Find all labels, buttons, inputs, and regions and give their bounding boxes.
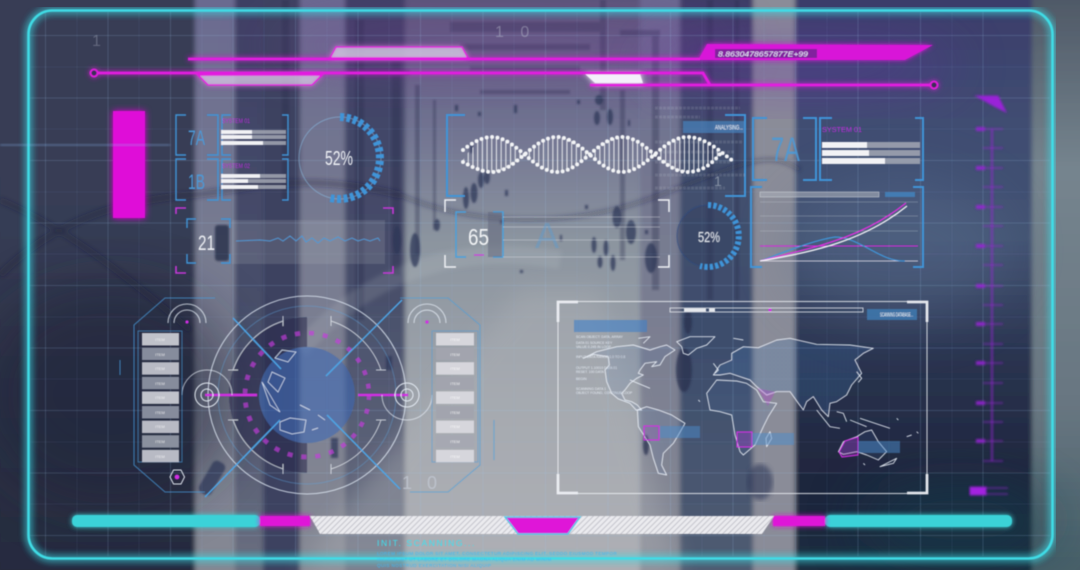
map chips [660, 426, 900, 453]
hex marker [170, 470, 184, 484]
bars 1B [221, 174, 286, 189]
label 1B: 1B [188, 171, 205, 194]
code readout: RESET. 100 DATA [576, 370, 605, 374]
outer rings [208, 296, 406, 494]
code text behind [655, 108, 745, 188]
panel: 7A bars right [753, 118, 923, 180]
inner arcs [228, 316, 386, 474]
diagonal blue lines [205, 300, 402, 497]
North America [583, 345, 675, 410]
right node [930, 81, 938, 89]
code readout: SCAN OBJECT: DATA, ARRAY [576, 335, 624, 339]
list rows: ITEM [155, 381, 165, 386]
line two with node [98, 73, 930, 85]
panel: world map [558, 302, 927, 494]
top right magenta banner [698, 44, 933, 60]
globe [229, 317, 355, 473]
magenta map regions [644, 388, 858, 457]
left target [182, 370, 232, 407]
right purple ruler [970, 96, 1008, 495]
list rows: ITEM [155, 395, 165, 400]
panel: 7A and 1B bars left [176, 115, 288, 200]
scanning caption: QUIS NOSTRUD EXERCITATION NISI ALIQUIP [377, 563, 491, 568]
panel: DNA bracket: ANALYSING... [715, 126, 743, 132]
bracket set 1B [176, 159, 288, 200]
line one [188, 58, 700, 60]
bracket set 7A [176, 115, 288, 155]
cyan right segments [825, 515, 1012, 527]
upper translucent tab [330, 47, 468, 58]
gauge 52 percent large [299, 117, 381, 199]
South America [637, 407, 685, 475]
ghost numerals: 1 0 [402, 473, 442, 493]
gauge 52 percent small: 52% [698, 229, 720, 246]
code readout: VALUE 0.245 IN LOOP [576, 345, 612, 349]
magenta right connector [773, 516, 825, 526]
map header [574, 320, 647, 332]
dark silhouettes [197, 95, 692, 497]
lower translucent tab [198, 75, 322, 85]
smoky shading [0, 285, 240, 505]
code readout: OBJECT FOUND, CONTINUE LOOP [576, 391, 633, 395]
panel: 7A bars right: 7A [771, 131, 800, 169]
list rows: ITEM [450, 337, 460, 342]
Africa [707, 380, 777, 455]
hatched band [310, 516, 774, 534]
panel: radar [182, 296, 432, 497]
list rows [142, 333, 179, 462]
scanning chip: SCANNING DATABASE... [880, 312, 913, 318]
list rows: ITEM [450, 366, 460, 371]
panel: readout 65: 65 [468, 224, 489, 250]
code readout: BEGIN [576, 377, 587, 381]
list rows: ITEM [450, 439, 460, 444]
faint dark helix [0, 160, 800, 350]
magenta left connector [260, 516, 310, 526]
centre magenta trapezoid [505, 517, 580, 534]
list rows: ITEM [155, 454, 165, 459]
analysis chip [683, 121, 745, 133]
progress strip [670, 308, 863, 312]
lighter corridor floor [300, 290, 680, 570]
Asia and Europe [713, 338, 873, 417]
panel: right list [400, 298, 494, 492]
bars 7A [221, 130, 286, 145]
Australia [838, 430, 887, 460]
code readout: SCANNING DATA 1 [576, 387, 606, 391]
gauge 52 percent small [677, 205, 739, 267]
panel: DNA bracket: 1 [714, 173, 722, 189]
blue flare [0, 144, 170, 146]
scanning caption: INIT. SCANNING... [377, 538, 476, 548]
panel: DNA bracket [447, 108, 745, 196]
list rows: ITEM [155, 352, 165, 357]
panel: line chart [751, 187, 923, 267]
magenta block [113, 111, 145, 218]
code readout [576, 335, 633, 395]
corridor shelving stripes [282, 0, 739, 320]
panel: 7A bars right: SYSTEM 01 [822, 127, 862, 134]
list rows: ITEM [450, 410, 460, 415]
scanning caption: LOREM IPSUM DOLOR SIT AMET, CONSECTETUR ADIPISCING ELIT, SEDDO EIUSMOD TEMPOR [377, 551, 617, 556]
magenta sight lines [205, 394, 408, 396]
panel: readout 65 [445, 200, 669, 267]
label 7A: 7A [188, 127, 205, 150]
ghost numerals: 1 0 [495, 24, 535, 41]
left node [90, 69, 98, 77]
ghost numerals [92, 24, 535, 493]
scanning caption: INCIDIDUNT UT LABORE ET DOLORE MAGNA ALIQUA ENIM AD MINIM [377, 557, 552, 562]
panel: readout 65: A [535, 215, 559, 256]
code readout: OUTPUT 1.10010 DATA 01 [576, 366, 617, 370]
list rows: ITEM [155, 424, 165, 429]
list rows: ITEM [450, 352, 460, 357]
DNA helix [463, 137, 733, 172]
magenta captions: SYSTEM 01 [222, 119, 251, 125]
list rows [436, 333, 474, 462]
right target [382, 383, 432, 420]
scanning caption [377, 538, 617, 568]
top magenta circuit lines [90, 44, 938, 89]
panel: readout 21 waveform: 21 [198, 232, 215, 255]
continents [583, 337, 918, 475]
ghost numerals: 1 [92, 33, 101, 50]
list rows: ITEM [155, 439, 165, 444]
list rows: ITEM [450, 424, 460, 429]
bottom status bar [72, 515, 1012, 534]
list rows: ITEM [450, 395, 460, 400]
islands [630, 337, 918, 467]
white tab [585, 74, 643, 83]
scanning chip [867, 309, 917, 320]
gauge 52 percent large: 52% [325, 148, 353, 170]
magenta dot ring [245, 333, 369, 457]
magenta captions [222, 119, 251, 170]
panel: readout 21 waveform [176, 208, 393, 273]
banner value: 8.8630478657877E+99 [718, 50, 809, 58]
code readout: INPUT DATA RANGE 1.0 TO 0.8 [576, 355, 625, 359]
list rows: ITEM [155, 337, 165, 342]
list rows: ITEM [450, 454, 460, 459]
magenta captions: SYSTEM 02 [222, 164, 251, 170]
list rows: ITEM [155, 410, 165, 415]
panel: left list [120, 298, 215, 492]
Greenland [677, 337, 715, 355]
cyan left segments [72, 515, 260, 527]
list rows: ITEM [450, 381, 460, 386]
list rows: ITEM [155, 366, 165, 371]
code readout: DATA 01 SOURCE KEY [576, 341, 613, 345]
map frame [558, 302, 927, 494]
